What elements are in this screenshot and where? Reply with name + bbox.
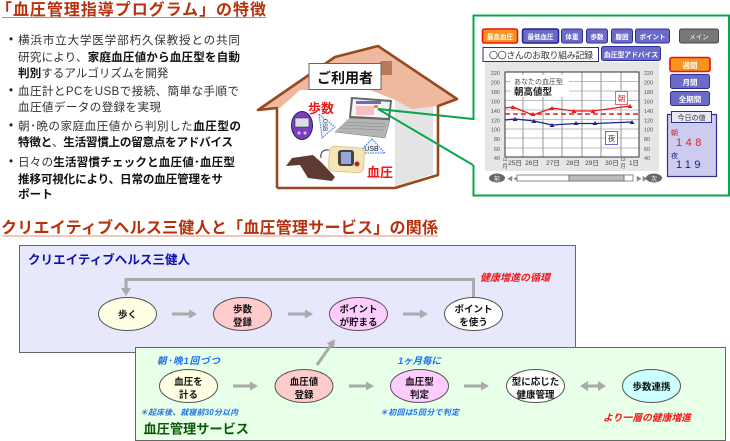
right axis labels: 200 [644,80,653,86]
today's values: 夜 [671,152,678,160]
right axis labels: 220 [644,71,653,77]
right axis labels: 40 [644,156,650,162]
node: use points: を使う [459,316,488,328]
left axis labels: 160 [491,100,500,106]
right axis labels: 120 [644,118,653,124]
arrow [233,384,251,388]
icon: usb link left: USB [321,119,327,131]
period buttons [670,58,710,106]
evening tag [606,132,618,144]
today's values: 148 [676,137,705,149]
panel: blood pressure service [136,348,726,440]
note: measurement timing: ＊起床後、就寝前30分以内 [140,408,239,417]
label: steps: 歩数 [308,101,334,116]
evening series [505,117,634,127]
title: program features: 「血圧管理指導プログラム」の特徴 [0,0,266,19]
scroll bar: 次 [651,175,657,183]
text block: feature bullets: 横浜市立大学医学部朽久保教授との共同 [18,33,240,47]
text block: feature bullets: • [9,84,13,97]
record title box [483,48,598,62]
node: type-based health management [506,370,564,402]
panel heading: 血圧管理サービス [144,420,249,436]
period buttons: 月間 [682,78,698,87]
text block: feature bullets: 血圧計とPCをUSBで接続、簡単な手順で [18,84,239,98]
node: step registration: 歩数 [233,304,252,316]
right axis labels [644,71,653,162]
line chart [485,62,659,171]
node: points accumulate [330,298,388,330]
icon: pedometer [292,112,312,140]
text block: feature bullets: • [9,33,13,46]
screen tab buttons: 腹囲 [616,32,629,41]
double arrow [580,381,606,391]
date labels: 29日 [585,159,599,167]
left axis labels [491,71,500,162]
arrow: blood pressure registration to points [317,345,331,365]
loop arrow [121,280,474,297]
date labels: 月 [620,163,626,170]
panel: creative health [20,246,576,352]
annotation: once morning and evening: 朝･晩1回づつ [157,355,221,367]
node: value registration: 登録 [294,389,314,401]
date labels: 月 [502,163,508,170]
node: step registration: 登録 [233,316,252,328]
today's values [668,112,716,176]
screen tab buttons: 最高血圧 [487,32,514,41]
annotation: health cycle: 健康増進の循環 [480,272,552,284]
illustration: house with devices [258,46,457,188]
date labels: 12 [620,157,626,162]
node: step linkage [622,370,680,402]
text block: feature bullets: 血圧値データの登録を実現 [18,100,161,114]
house interior [277,58,431,187]
date labels: 30日 [605,159,619,167]
period buttons: 全期間 [679,94,701,104]
right axis labels: 180 [644,90,653,96]
morning tag: 朝 [618,94,625,103]
icon: blood pressure monitor with cuff [286,146,365,181]
screen tab buttons: 歩数 [590,32,604,41]
date labels: 27日 [546,159,560,167]
icon: laptop [335,97,392,138]
screen tab buttons: ポイント [640,33,666,41]
morning tag [616,92,628,104]
left axis labels: 180 [491,90,500,96]
evening tag: 夜 [608,134,616,143]
node: step registration [214,298,272,330]
text block: feature bullets: • [9,119,13,132]
node: type-based health management: 型に応じた [512,376,559,388]
today's values: 朝 [671,129,678,137]
node: value registration: 血圧値 [290,376,319,388]
left axis labels: 60 [494,147,500,153]
right axis labels: 80 [644,137,650,143]
left axis labels: 140 [491,109,500,115]
node: step linkage: 歩数連携 [632,381,671,393]
text block: feature bullets: 日々の生活習慣チェックと血圧値･血圧型 [18,155,235,169]
note: first judgment: ＊初回は5回分で判定 [380,408,460,417]
node: walk: 歩く [118,309,137,321]
today's values: 119 [676,159,704,171]
text block: feature bullets: 研究により、家庭血圧値から血圧型を自動 [18,50,240,64]
screen tab buttons: 体重 [566,32,579,41]
node: use points [444,298,502,330]
screen tab buttons: 最低血圧 [528,32,554,41]
node: type judgment [390,370,448,402]
systolic reference line [505,113,639,115]
panel: web screen frame [474,16,729,196]
left axis labels: 200 [491,80,500,86]
text block: feature bullets: 朝･晩の家庭血圧値から判別した血圧型の [18,119,241,133]
panel heading: クリエイティブヘルス三健人 [28,252,190,267]
left axis labels: 120 [491,118,500,124]
text block: feature bullets [9,33,241,201]
text block: feature bullets: • [9,155,13,168]
annotation: monthly: 1ヶ月毎に [398,355,442,367]
date labels: 1日 [629,159,639,167]
date labels: 25日 [508,159,522,167]
annotation: further health: より一層の健康増進 [603,412,692,424]
node: type-based health management: 健康管理 [516,389,555,401]
arrow [349,384,367,388]
house roof [258,46,457,110]
period buttons: 週間 [682,60,698,70]
date labels: 28日 [566,159,580,167]
scroll bar: ▶▶ [636,176,648,183]
text block: feature bullets: 判別するアルゴリズムを開発 [18,66,169,80]
node: use points: ポイント [454,304,493,316]
arrow [288,312,306,316]
node: type judgment: 判定 [410,389,429,401]
user label: ご利用者 [317,70,373,86]
text block: feature bullets: ポート [18,188,53,201]
scroll bar [489,174,662,183]
date labels: 26日 [525,159,539,167]
arrow [464,384,482,388]
node: type judgment: 血圧型 [405,376,434,388]
scroll bar: ◀◀ [507,176,519,183]
screen tab buttons [482,29,718,43]
date labels: 11 [503,157,508,162]
icon: usb link left [319,114,335,138]
node: points accumulate: ポイント [339,304,378,316]
left axis labels: 220 [491,71,500,77]
left axis labels: 100 [491,128,500,134]
node: measure: 血圧を [174,376,203,388]
node: points accumulate: が貯まる [339,316,378,328]
record title box: 〇〇さんのお取り組み記録 [489,50,593,60]
advice button: 血圧型アドバイス [604,50,658,59]
arrow [172,312,190,316]
screen tab buttons: メイン [689,34,709,41]
user label [309,64,381,90]
today's values: 今日の値 [678,113,706,122]
morning series [505,104,632,116]
chart annotation: blood pressure type [511,75,569,98]
right axis labels: 160 [644,100,653,106]
advice button [602,46,660,60]
text block: feature bullets: 推移可視化により、日常の血圧管理をサ [18,172,223,186]
right axis labels: 100 [644,128,653,134]
left axis labels: 80 [494,137,500,143]
node: measure: 計る [179,389,198,401]
callout lines from laptop to screen [378,109,473,165]
node: value registration [275,370,333,402]
chart annotation: blood pressure type: 朝高値型 [514,86,553,98]
right axis labels: 60 [644,147,650,153]
label: blood pressure: 血圧 [367,165,393,180]
scroll bar: 前 [494,175,500,183]
icon: usb link right [358,139,385,153]
text block: feature bullets: 特徴と、生活習慣上の留意点をアドバイス [18,135,233,149]
right axis labels: 140 [644,109,653,115]
node: measure [160,370,218,402]
node: walk [98,298,156,330]
arrow [403,312,421,316]
left axis labels: 40 [494,156,500,162]
chart annotation: blood pressure type: あなたの血圧型 [514,77,563,86]
date labels [502,157,639,170]
icon: usb link right: USB [364,146,379,153]
title: relationship heading: クリエイティブヘルス三健人と「血圧管理サービス」の関係 [1,218,438,237]
